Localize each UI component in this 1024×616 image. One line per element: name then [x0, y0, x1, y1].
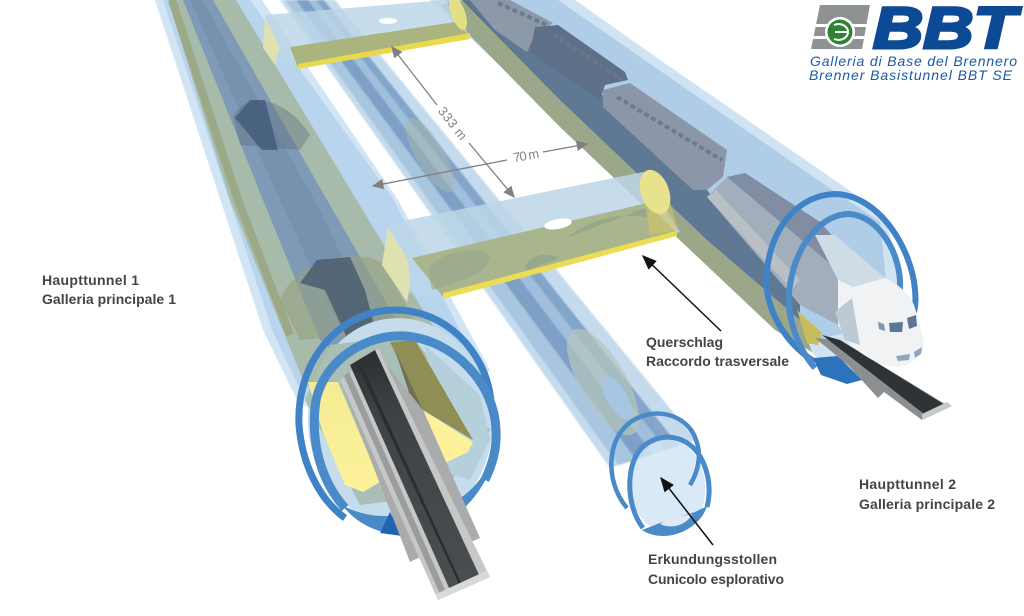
label: Haupttunnel 1	[42, 272, 176, 307]
label: Haupttunnel 2: Haupttunnel 2	[859, 476, 956, 492]
dimension 70 m: 70 m	[512, 146, 540, 165]
logo subtitle: Brenner Basistunnel BBT SE	[809, 67, 1013, 83]
dimension 70 m	[373, 144, 587, 186]
label: Querschlag	[646, 334, 789, 369]
tunnel 2 rings	[766, 194, 915, 384]
train silhouette lower	[280, 256, 420, 340]
label: Haupttunnel 1: Haupttunnel 1	[42, 272, 139, 288]
tunnel 1 rings	[299, 310, 499, 536]
olive wall right	[390, 340, 473, 440]
logo emblem	[811, 5, 870, 49]
yellow wall right	[423, 410, 473, 463]
tunnel 2 track	[815, 335, 952, 420]
yellow wall left	[308, 382, 380, 492]
pilot tunnel rings	[611, 414, 709, 528]
arrow to pilot tunnel	[661, 478, 713, 545]
cross passage upper	[263, 0, 471, 69]
tunnel 1 inner floor	[168, 0, 448, 400]
dark strip below train	[462, 0, 800, 320]
train nose	[815, 235, 923, 367]
label: Haupttunnel 2: Galleria principale 2	[859, 496, 995, 512]
carriage 3	[603, 83, 727, 190]
olive floor of tunnel 2	[440, 0, 812, 352]
tunnel 1 track	[340, 348, 490, 600]
dimension 333 m: 333 m	[435, 104, 470, 143]
logo BBT	[809, 0, 1021, 83]
carriage window stripes	[498, 3, 722, 160]
tunnel 1 open end	[298, 309, 502, 535]
yellow block tunnel 2	[797, 310, 822, 345]
logo subtitle	[809, 53, 1017, 83]
train windows	[889, 322, 903, 332]
label: Erkundungsstollen	[648, 551, 784, 587]
tunnel 1 blue floor band	[183, 0, 410, 365]
train silhouette upper	[233, 101, 310, 150]
label: Haupttunnel 1: Galleria principale 1	[42, 291, 176, 307]
label: Erkundungsstollen: Cunicolo esplorativo	[648, 571, 784, 587]
carriage 2	[530, 25, 628, 100]
pilot tunnel base	[642, 506, 707, 536]
pilot tunnel open end	[621, 431, 713, 539]
carriage 1	[470, 0, 553, 52]
label: Querschlag: Raccordo trasversale	[646, 353, 789, 369]
tunnel 1 base	[342, 440, 499, 534]
rear train section	[707, 173, 858, 325]
tunnel 2 base wedge	[813, 356, 862, 384]
pilot tunnel: Erkundungsstollen	[280, 0, 713, 539]
dimension 333 m	[392, 47, 514, 197]
train headlights	[896, 354, 910, 361]
label: Querschlag: Querschlag	[646, 334, 723, 350]
tunnel 1 body	[155, 0, 490, 470]
label: Erkundungsstollen: Erkundungsstollen	[648, 551, 777, 567]
cross passage lower	[382, 166, 680, 302]
arrow to cross passage	[643, 256, 721, 331]
label: Haupttunnel 2	[859, 476, 995, 512]
logo subtitle: Galleria di Base del Brennero	[810, 53, 1017, 69]
tunnel 2 body	[430, 0, 905, 375]
